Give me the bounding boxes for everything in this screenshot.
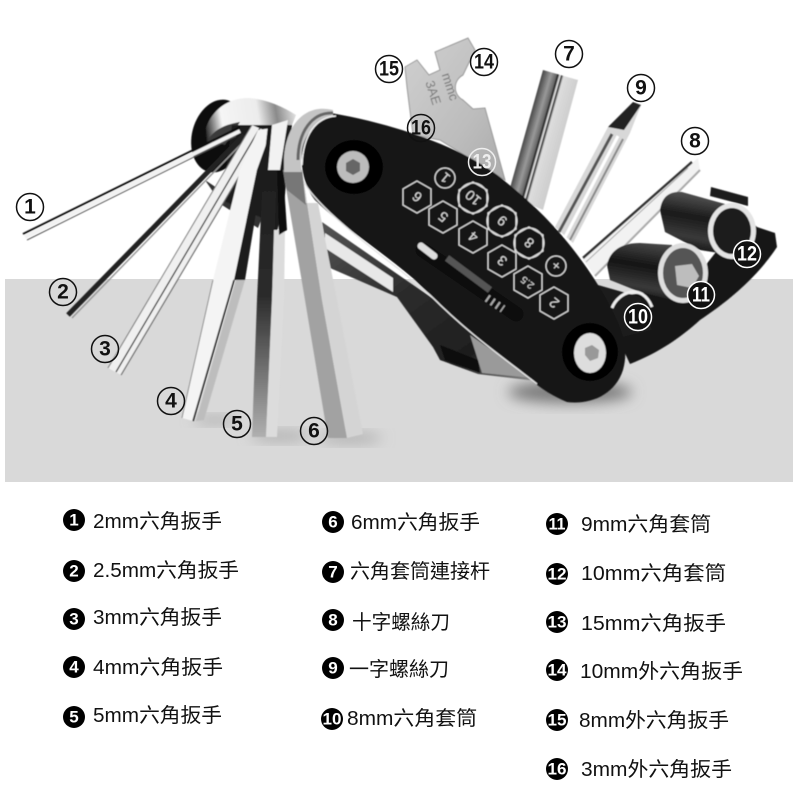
callout 9: 9 [635,76,647,100]
barrel pivot [183,94,296,235]
size marks [403,168,568,319]
legend item 16: 16 [548,760,566,778]
legend item 10: 8mm六角套筒 [347,707,477,730]
legend item 12: 10mm六角套筒 [581,562,726,585]
callout 12: 12 [737,242,757,266]
legend item 14: 10mm外六角扳手 [580,660,743,683]
legend item 10: 10 [322,710,342,728]
callout 13: 13 [472,150,492,174]
spanner plate: mmc [439,71,462,103]
callout 8: 8 [689,130,701,152]
black folding handle: 2 [546,294,562,312]
ground shadows [193,381,632,443]
legend item 7: 六角套筒連接杆 [350,560,490,583]
black folding handle: 5 [435,208,451,226]
legend item 15: 8mm外六角扳手 [579,709,729,732]
legend item 12: 12 [548,564,566,584]
callout 6: 6 [308,420,320,442]
callout 4 [158,388,184,414]
legend item 8: 8 [328,610,338,630]
legend item 1: 2mm六角扳手 [93,510,222,533]
callout 11: 11 [692,284,710,306]
bolt top [337,151,369,183]
legend item 1: 1 [69,510,79,530]
legend item 3: 3mm六角扳手 [93,606,222,629]
slot [423,250,516,314]
flat screwdriver [555,102,641,243]
lower back plate [322,222,545,382]
legend item 9: 9 [328,658,338,678]
hex key 1 [23,127,240,240]
legend item 2: 2 [69,562,79,580]
legend item 6: 6 [328,512,338,532]
legend item 5: 5mm六角扳手 [93,704,222,727]
legend item 11: 11 [548,514,566,534]
socket tray [600,215,777,364]
black folding handle: 4 [465,228,481,246]
callout 5: 5 [231,412,243,436]
callout 1: 1 [24,196,36,218]
callout 5 [224,410,250,438]
callout 7 [556,40,582,68]
socket 10 [598,285,652,340]
callout 3: 3 [99,338,111,360]
legend item 16: 3mm外六角扳手 [581,758,732,781]
callout 16: 16 [411,116,431,140]
legend item 6: 6mm六角扳手 [351,511,480,534]
legend item 11: 9mm六角套筒 [581,513,711,536]
black folding handle: 1 [437,169,453,187]
legend item 2: 2.5mm六角扳手 [93,559,239,582]
callout 2 [50,278,76,306]
black folding handle: 3 [494,252,510,270]
black folding handle [302,113,625,403]
black folding handle: 10 [462,187,484,209]
hex key 2 [68,135,248,318]
legend item 9: 一字螺絲刀 [349,658,449,681]
callout 4: 4 [165,390,177,412]
legend item 7: 7 [328,562,338,582]
icon: multi-tool illustration [23,38,777,438]
callout 15: 15 [379,58,399,80]
legend item 13: 15mm六角扳手 [581,612,726,635]
socket tray tab [710,187,748,206]
cross screwdriver [582,158,700,276]
socket 11 [607,243,708,303]
black folding handle: 8 [521,234,537,252]
legend item 8: 十字螺絲刀 [352,611,450,634]
bolt bottom [574,333,606,373]
legend item 13 [546,611,726,635]
legend item 14: 14 [548,660,567,680]
legend item 4: 4 [69,658,79,676]
legend item 5: 5 [69,708,79,726]
callout 1 [16,194,44,220]
legend column 3 [546,513,743,781]
callout 9 [628,74,654,102]
black folding handle: 9 [494,212,510,230]
callout 7: 7 [563,42,575,66]
callout 10: 10 [628,306,648,328]
legend item 4: 4mm六角扳手 [93,656,223,679]
bolt recess top [325,140,383,194]
hex key 3 [108,125,266,375]
callout 2: 2 [57,280,69,304]
legend item 13: 13 [548,612,566,632]
spanner plate [405,38,505,180]
hex socket extension bar [508,70,578,210]
hex key 5 [252,120,288,437]
legend item 8 [322,609,450,634]
legend item 3: 3 [69,610,79,628]
socket 12 [660,192,756,259]
legend column 2 [321,511,490,730]
callout 8 [682,128,708,154]
hex key 4 [182,125,278,421]
callout 14: 14 [474,50,494,74]
hex key 6 [283,109,363,438]
grey background panel [5,279,793,482]
black folding handle: + [548,257,564,275]
legend item 15: 15 [548,710,566,730]
spanner plate: 3AE [422,79,444,107]
legend column 1 [63,509,239,728]
black folding handle: 2.5 [519,273,537,291]
inner bars behind keys [205,180,262,228]
black folding handle: 6 [409,188,425,206]
callout numbers on the photo [16,40,760,444]
bolt recess bottom [562,323,618,381]
callout 6 [300,418,328,444]
callout 3 [92,336,118,362]
